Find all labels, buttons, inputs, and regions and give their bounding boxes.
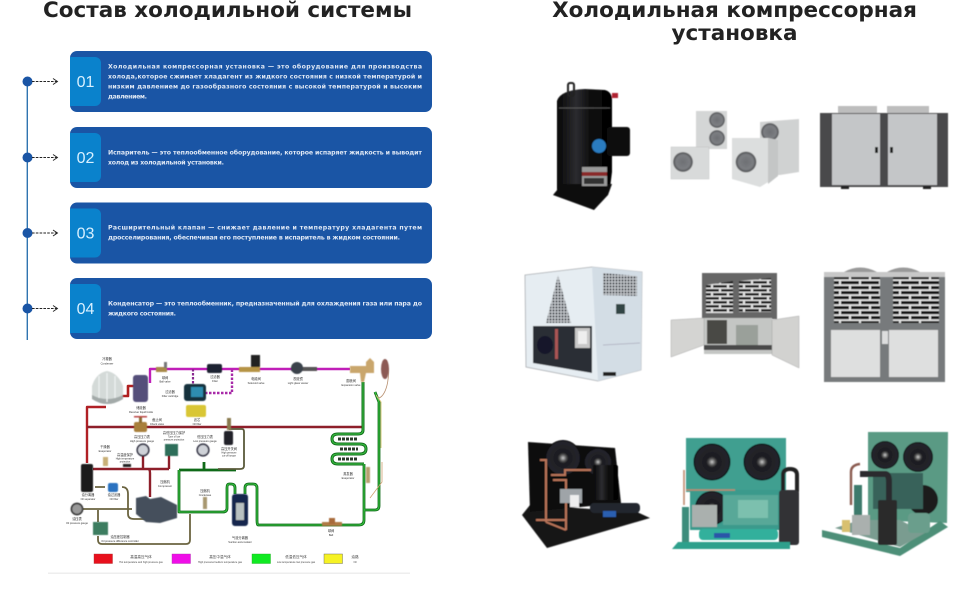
label: crankcase sensor: 压缩机 (200, 489, 210, 493)
legend: yellow: Oil (353, 561, 357, 564)
icon: filter (207, 364, 222, 373)
card 04 (70, 278, 432, 339)
label: liquid bottle: Receiver liquid bottle (129, 410, 154, 414)
legend: green: Low temperature low pressure gas (277, 561, 316, 564)
text 01: низким давлением до газообразного состояния с высокой температурой и высоким (108, 83, 422, 91)
text 01: Холодильная компрессорная установка — это оборудование для производства (108, 63, 422, 71)
text 03: дросселирования, обеспечивая его поступление в испаритель в жидком состоянии. (108, 233, 400, 241)
refrigeration circuit diagram (48, 355, 410, 574)
label: filter cartridge: Filter cartridge (162, 394, 179, 398)
label: pressure protection: Type of low (168, 436, 180, 439)
label: sight glass: Light glass viewer (288, 381, 308, 385)
photo: open-door unit (671, 273, 799, 368)
label: pressure protection: 高低压压力保护 (163, 431, 185, 435)
icon: oil filter (108, 483, 118, 492)
text 02 (108, 149, 422, 167)
text 01 (108, 63, 422, 101)
title: compressor unit: установка (671, 21, 798, 46)
icon: capillary component (366, 467, 370, 483)
photo: white chiller unit (525, 267, 642, 381)
marker 04 (22, 304, 58, 314)
number 03 (70, 208, 101, 258)
number 01: 01 (77, 74, 94, 91)
icon: suction accumulator (232, 494, 248, 526)
label: oil separator: Oil separator (81, 497, 96, 501)
label: liquid bottle: 储液器 (136, 406, 146, 410)
card 03 (70, 202, 432, 264)
label: oil filter: Oil filter (110, 497, 119, 501)
text 01: давлением. (108, 94, 147, 101)
photo: grilled front unit (824, 268, 945, 382)
icon: cooling tower (92, 371, 123, 404)
label: evaporator: Evaporator (342, 476, 354, 480)
number 04 (70, 284, 101, 333)
label: pressure protection: pressure protection (164, 439, 185, 442)
label: evaporator: 蒸发器 (343, 472, 353, 476)
diagram legend (94, 554, 359, 564)
label: pressure cutout: cut-off torque (222, 455, 237, 458)
legend: yellow: 油路 (351, 554, 359, 559)
icon: temperature probe (203, 497, 207, 509)
icon: check valve (134, 416, 147, 432)
card 02 (70, 127, 432, 188)
label: oil filter: 油过滤器 (108, 493, 120, 497)
number 03: 03 (77, 226, 94, 242)
label: filter: 过滤器 (210, 375, 220, 379)
photo: closed dark-frame unit (820, 106, 948, 189)
photo: black condensing unit (522, 440, 650, 548)
legend: magenta: 高压中温气体 (209, 554, 231, 559)
icon: screw compressor (136, 496, 177, 523)
label: expansion valve: Expansion valve (342, 383, 361, 387)
label: ball valve: Ball valve (159, 380, 171, 384)
icon: sight glass (291, 362, 317, 374)
icon: expansion valve (350, 358, 389, 382)
label: temperature protection: 高温度保护 (117, 453, 133, 457)
photo: outdoor units group (671, 111, 799, 187)
text 04 (108, 300, 422, 318)
label: filter cartridge: 过滤器 (165, 390, 175, 394)
legend: green (252, 554, 316, 564)
label: solenoid valve: 电磁阀 (251, 377, 261, 381)
legend: magenta (172, 554, 243, 564)
label: condenser: 冷凝器 (102, 357, 112, 361)
icon: temperature sensor (103, 457, 131, 467)
icon: high pressure gauge (137, 444, 149, 456)
label: ball valve: 球阀 (162, 376, 168, 380)
text 01: холода,которое сжимает хладагент из жидкого состояния с низкой температурой и (108, 73, 422, 81)
label: oil filter: 滤芯 (194, 418, 200, 422)
icon: solenoid valve (239, 355, 260, 372)
label: crankcase sensor: Crankcase (199, 493, 212, 497)
text 04: жидкого состояния. (108, 311, 176, 318)
label: compressor: Compressor (158, 484, 172, 488)
icon: pressure protection switch (165, 444, 178, 456)
refrigerant pipes (83, 360, 388, 544)
text 03 (108, 223, 422, 241)
photo: teal condensing unit angled (822, 432, 948, 556)
label: dryer: 干燥器 (100, 445, 110, 449)
label: temperature protection: High temperature (116, 458, 135, 461)
label: high pressure gauge: 高压压力表 (134, 435, 150, 439)
timeline with markers (22, 76, 58, 340)
photo: scroll compressor (553, 83, 630, 210)
number 01 (70, 57, 101, 106)
label: oil gauge: Oil pressure gauge (66, 521, 89, 525)
legend: yellow (324, 554, 359, 564)
icon: oil differential switch (93, 522, 108, 535)
label: pressure cutout: High pressure (222, 452, 237, 455)
label: oil gauge: 油压表 (72, 517, 82, 521)
label: dryer: Evaporator (99, 449, 111, 453)
label: oil filter: Oil filter (193, 422, 202, 426)
marker 02 (22, 152, 58, 162)
legend: red: 高温高压气体 (130, 554, 152, 559)
label: sight glass: 视液镜 (293, 377, 303, 381)
label: high pressure gauge: High pressure gauge (130, 439, 155, 443)
text 02: Испаритель — это теплообменное оборудование, которое испаряет жидкость и выводит (108, 149, 422, 157)
text 04: Конденсатор — это теплообменник, предназначенный для охлаждения газа или пара до (108, 300, 422, 308)
title: compressor unit (552, 0, 917, 46)
icon: ball valve (156, 362, 167, 372)
label: oil separator: 油分离器 (82, 493, 94, 497)
label: ball valve on line: 球阀 (328, 529, 334, 533)
number 04: 04 (77, 301, 94, 318)
legend: magenta: High pressure/medium temperature gas (198, 561, 243, 564)
text 02: холод из холодильной установки. (108, 159, 224, 167)
label: shut-off valve: 截止阀 (152, 418, 162, 422)
label: condenser: Condenser (101, 362, 113, 366)
label: low pressure gauge: Low pressure gauge (193, 439, 217, 443)
label: expansion valve: 膨胀阀 (346, 379, 356, 383)
photo: teal condensing unit front (672, 438, 799, 549)
label: filter: Filter (212, 379, 218, 383)
legend: green: 低温低压气体 (285, 554, 307, 559)
marker 01 (22, 76, 58, 86)
label: accumulator: Suction accumulator (228, 540, 252, 544)
icon: oil filter element (186, 405, 206, 417)
icon: oil pressure gauge (71, 503, 83, 515)
label: oil differential: 油压差控制器 (110, 535, 130, 539)
label: low pressure gauge: 低压压力表 (197, 435, 213, 439)
photo grid of compressor units (522, 83, 948, 556)
icon: filter cartridge (184, 384, 206, 401)
card 01 (70, 51, 432, 112)
label: accumulator: 气液分离器 (232, 536, 248, 540)
diagram labels (66, 356, 361, 544)
number 02: 02 (77, 150, 94, 167)
label: oil differential: Oil pressure difference controller (101, 539, 139, 543)
icon: oil separator (81, 464, 93, 492)
icon: low pressure gauge (197, 444, 209, 456)
text 03: Расширительный клапан — снижает давление и температуру хладагента путем (108, 223, 422, 231)
label: temperature protection: protection (120, 461, 131, 464)
label: compressor: 压缩机 (160, 480, 170, 484)
label: ball valve on line: Ball (329, 533, 334, 537)
label: pressure cutout: 高压开关阀 (221, 447, 237, 451)
number 02 (70, 133, 101, 182)
icon: ball valve on suction line (322, 518, 342, 526)
marker 03 (22, 228, 58, 238)
components (71, 355, 389, 535)
label: shut-off valve: Check valve (150, 422, 165, 426)
label: solenoid valve: Solenoid valve (248, 381, 265, 385)
legend: red: Hot temperature and high pressure gas (119, 561, 163, 564)
icon: liquid receiver (133, 375, 148, 402)
icon: pressure cutout valve (224, 418, 233, 445)
legend: red (94, 554, 163, 564)
